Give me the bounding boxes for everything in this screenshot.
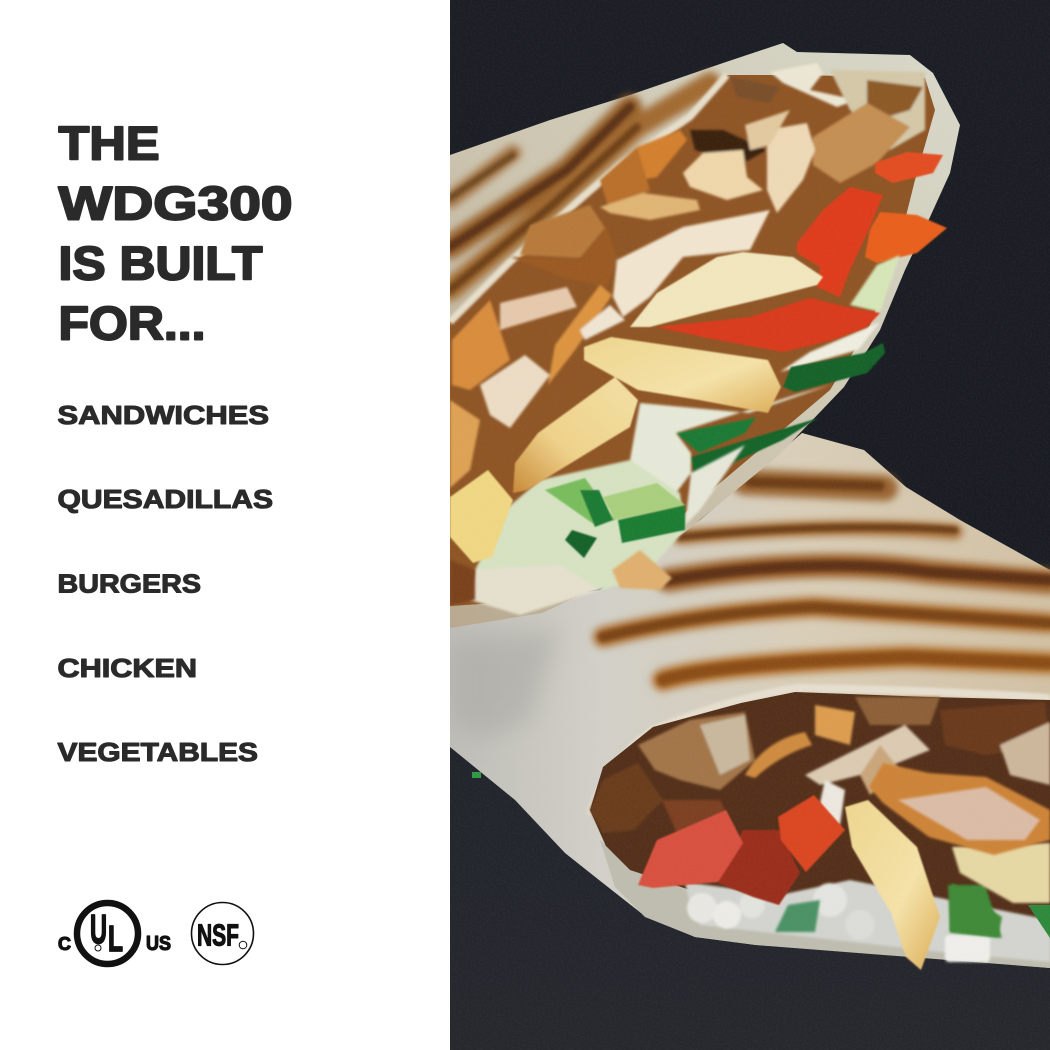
lower wrap: [450, 433, 1050, 970]
grill marks: [603, 482, 1050, 680]
filling: tomato strip: [657, 298, 880, 352]
heading: [58, 118, 292, 350]
filling: french fries: [450, 337, 781, 563]
icon: NSF certification mark: [192, 902, 254, 964]
tomato chunks: [638, 795, 845, 905]
heading: THE: [58, 118, 160, 170]
photographic grain overlay: [450, 0, 1050, 1050]
icon: cULus certification mark: US: [146, 933, 171, 955]
filling: cucumber slices: [676, 343, 885, 480]
shredded white onion: [685, 880, 1050, 962]
opening filling dark base: [590, 692, 1050, 920]
green herbs: front: [950, 883, 1002, 937]
filling: chicken meat pieces: [450, 63, 925, 488]
fry: lower right: [952, 843, 1050, 903]
filling: bell pepper strips: [797, 152, 947, 297]
rim of tortilla bottom: [600, 840, 1050, 968]
list of foods: SANDWICHES: [58, 400, 269, 430]
upper wrap: [450, 43, 960, 628]
filling: lettuce lower: [470, 385, 830, 615]
panel: white text column: [0, 0, 450, 1050]
filling: diced cucumber: [545, 478, 685, 558]
heading: FOR...: [58, 298, 206, 350]
list of foods: CHICKEN: [58, 653, 197, 683]
fry: upright: [845, 800, 940, 970]
icon: cULus certification mark: [58, 903, 171, 964]
filling: french fry upper: [630, 252, 823, 327]
heading: IS BUILT: [58, 238, 262, 290]
list of foods: QUESADILLAS: [58, 484, 273, 514]
photo background: dark slate: [450, 0, 1050, 1050]
list of foods: [58, 400, 273, 767]
chicken strands: [590, 697, 1050, 840]
tortilla lip above opening: [590, 688, 1050, 815]
icon: NSF certification mark: NSF: [197, 918, 239, 952]
upper wrap tortilla body: [450, 43, 960, 628]
icon: cULus certification mark: U: [90, 906, 107, 952]
tortilla fold lip: [450, 75, 727, 322]
green speck on slate: [472, 772, 481, 778]
chicken bit at wrap bottom: [612, 550, 672, 590]
list of foods: BURGERS: [58, 568, 201, 598]
heading: WDG300: [58, 178, 292, 230]
chicken breast strip: [869, 763, 1050, 855]
grill marks: [450, 83, 710, 290]
shadow on tortilla side: [454, 630, 556, 734]
filling dark base: [450, 75, 935, 606]
green herbs: [775, 900, 820, 932]
photo: grilled chicken wraps: [450, 0, 1050, 1050]
icon: cULus certification mark: L: [108, 918, 123, 959]
list of foods: VEGETABLES: [58, 737, 258, 767]
lower wrap tortilla body: [450, 433, 1050, 968]
icon: cULus certification mark: C: [58, 934, 71, 954]
filling: lettuce right: [850, 255, 900, 312]
